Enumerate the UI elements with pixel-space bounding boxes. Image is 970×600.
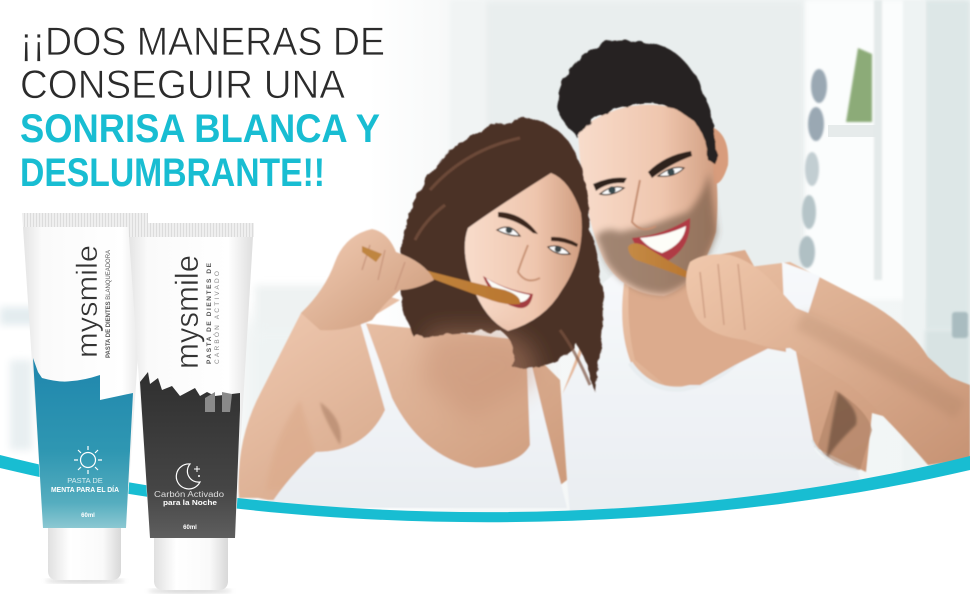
man fist and forearm bbox=[686, 254, 970, 465]
left tube shadow bbox=[45, 579, 125, 583]
left tube caption: PASTA DE bbox=[67, 476, 103, 485]
right tube logo: mysmile bbox=[169, 255, 205, 369]
icon: sun bbox=[74, 446, 102, 474]
left tube logo: mysmile bbox=[71, 245, 104, 358]
man torso and arm skin bbox=[560, 262, 970, 472]
curved white base bbox=[0, 468, 970, 600]
left tube blue paint bbox=[33, 358, 133, 528]
man armpit shadow bbox=[818, 390, 872, 470]
icon: moon bbox=[176, 464, 200, 489]
left tube cap bbox=[48, 526, 121, 580]
man tank top bbox=[559, 262, 860, 512]
right tube caption: Carbón Activado bbox=[154, 490, 225, 499]
woman brush grip bbox=[362, 246, 382, 262]
man hair bbox=[558, 40, 716, 165]
woman hand bbox=[301, 229, 434, 330]
tube: blue day paste: 60ml bbox=[81, 513, 95, 519]
man eyes and brows bbox=[593, 151, 692, 229]
man toothbrush bbox=[628, 243, 690, 278]
woman eyes and brows bbox=[497, 212, 578, 280]
man neck bbox=[628, 250, 775, 385]
woman mouth bbox=[483, 276, 533, 308]
man ear bbox=[712, 127, 728, 184]
photo: man bbox=[558, 40, 970, 512]
man mouth bbox=[632, 218, 690, 264]
title: CONSEGUIR UNA bbox=[20, 63, 345, 107]
woman hair bbox=[400, 118, 603, 393]
tube: charcoal night paste: para la Noche bbox=[163, 498, 217, 507]
title: SONRISA BLANCA Y bbox=[20, 107, 380, 151]
tube: blue day paste: MENTA PARA EL DÍA bbox=[51, 485, 120, 494]
right tube charcoal paint bbox=[140, 372, 240, 538]
woman toothbrush bbox=[362, 246, 520, 304]
man head bbox=[578, 105, 718, 296]
right tube crimp bbox=[128, 223, 254, 237]
man stubble bbox=[596, 172, 717, 294]
tube: charcoal night paste: 60ml bbox=[183, 525, 197, 531]
woman tank top bbox=[268, 321, 567, 508]
teal curved band bbox=[0, 455, 970, 522]
right tube cap bbox=[154, 536, 228, 590]
title: ¡¡DOS MANERAS DE bbox=[20, 20, 385, 64]
woman arm and chest skin bbox=[238, 280, 567, 500]
tube: charcoal night paste: CARBÓN ACTIVADO bbox=[212, 271, 221, 364]
right tube body bbox=[129, 237, 253, 538]
photo: woman bbox=[238, 118, 603, 508]
left tube label: PASTA DE DIENTES BLANQUEADORA bbox=[105, 249, 112, 358]
left tube crimp bbox=[22, 213, 148, 227]
tube: blue day paste bbox=[22, 213, 148, 583]
left tube body bbox=[23, 227, 147, 528]
right tube label: PASTA DE DIENTES DE bbox=[206, 262, 213, 364]
right tube shadow bbox=[148, 589, 232, 593]
woman head bbox=[465, 173, 582, 331]
title: DESLUMBRANTE!! bbox=[20, 151, 325, 195]
tube: charcoal night paste bbox=[128, 223, 254, 593]
title bbox=[20, 20, 385, 195]
woman neck shadow bbox=[420, 330, 540, 420]
